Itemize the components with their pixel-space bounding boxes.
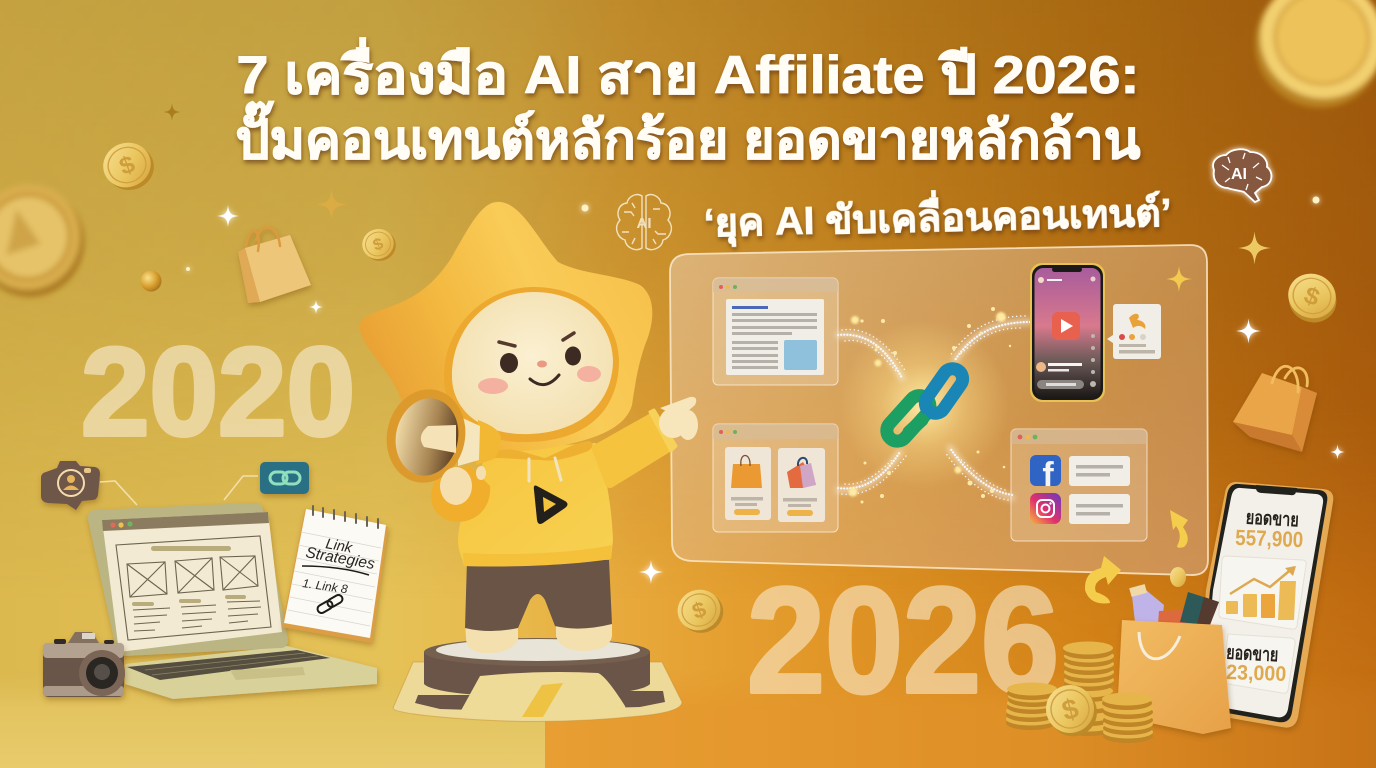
nose [537,360,547,368]
megaphone bell ring [378,382,474,490]
icon: chain link [883,365,967,445]
floor: left yellow [0,694,545,768]
notebook: link strategies: Link [324,536,354,557]
sparkle in panel [1166,266,1192,292]
window: shop [713,424,838,532]
small gold bead [140,270,162,292]
sparkle streams [838,316,1030,500]
bag items [1129,584,1219,625]
connector line camera [100,481,137,505]
coin lower centre: $ [689,597,710,624]
hoodie hem [463,545,612,567]
icon: shopping bag right [1233,366,1317,452]
year 2026: 2026 [747,556,1059,724]
sparkle: white right [1236,318,1261,344]
sales label lower: ยอดขาย [1226,643,1279,666]
megaphone plunger [421,425,456,453]
pedestal dark cylinder [424,652,650,698]
hoodie play icon [534,486,568,524]
megaphone band [458,416,480,466]
coin top left: $ [116,150,139,181]
icon: instagram [1030,493,1061,524]
front coin [1041,679,1102,742]
pedestal base [393,662,682,722]
window: article [713,278,838,385]
pedestal white top [436,639,640,661]
pedestal ring top [424,638,650,666]
browser bar [102,512,269,531]
right arm sleeve [597,418,670,483]
coin near bag left [358,224,400,266]
link badge icon [260,462,309,494]
holding hand [440,466,486,505]
floor: right orange [545,700,1229,768]
sparkle: white lower centre [639,560,663,584]
laptop [88,503,377,699]
decorative coin: large blurred top right [1234,0,1376,128]
coin stack back [1063,642,1114,736]
sparkle: white far right [1330,444,1345,460]
year 2020: 2020 [81,323,355,462]
gold arrow large [1085,556,1121,603]
shorts [465,560,612,631]
laptop screen [102,512,282,652]
wireframe page [116,536,271,640]
holding sleeve [431,466,490,522]
hoodie body [458,443,613,566]
sparkle: gold top left [163,103,181,121]
notebook: link strategies: Strategies [304,544,376,573]
pedestal front plate [458,672,628,720]
coin stacks [1006,642,1153,743]
laptop base [125,646,377,699]
icon: AI brain centre: AI [636,215,652,232]
coin right edge [1281,267,1344,329]
title [236,37,1140,170]
shopping bag large [1117,620,1231,734]
small coin [1170,567,1186,587]
coin stack left [1006,682,1058,730]
sales figure top: 557,900 [1235,525,1304,552]
camera [43,632,125,697]
notebook: link strategies [282,506,388,643]
phone: video [1030,263,1105,402]
right cuff [650,410,676,451]
sparkle: gold left [316,189,347,220]
chart card [1219,556,1306,629]
coin top left [97,135,160,197]
sparkle: white left [217,205,239,227]
background top shading [0,0,1376,516]
centre glow [839,320,1009,490]
sales label top: ยอดขาย [1245,508,1299,531]
coin near bag left: $ [370,234,386,255]
sparkle: gold right [1238,232,1271,264]
icon: AI brain centre [617,195,671,250]
chat card [1107,304,1161,359]
laptop lid [88,503,288,656]
coin lower centre [672,583,729,639]
camera chat bubble icon [41,461,100,510]
floor [0,694,1229,768]
legs [465,620,612,653]
pedestal gold slash [522,683,563,717]
subtitle: ‘ยุค AI ขับเคลื่อนคอนเทนต์’ [703,185,1172,247]
background right edge shading [1014,0,1376,624]
sales figure lower: 23,000 [1226,661,1287,686]
megaphone tube [476,420,501,465]
icon: facebook: f [1042,456,1054,494]
front coin: $ [1059,692,1082,726]
notebook: link strategies: 1. Link 8 [302,576,349,596]
decorative coin: large blurred left [0,169,101,312]
glow dots [186,196,1320,271]
pointing hand [659,397,698,440]
face [452,292,613,434]
coin right edge: $ [1300,282,1323,312]
window: social [1011,429,1147,541]
icon: shopping bag left [238,227,311,303]
gold arrow small [1170,510,1188,548]
glass panel [670,245,1208,575]
pedestal tabs [415,691,665,710]
character [360,202,698,722]
hood inner ring [444,287,619,442]
mouth [530,375,559,385]
sales phone [1196,482,1333,728]
sparkle: white small [309,300,323,314]
cheeks [478,366,601,394]
eyes and brows [500,346,581,373]
connector line link [224,476,258,500]
title line 1: 7 เครื่องมือ AI สาย Affiliate ปี 2026: [236,37,1140,105]
megaphone bell inside [389,392,465,482]
hood star [360,202,652,452]
hoodie collar and strings [495,441,593,481]
icon: AI brain right [1213,149,1271,202]
megaphone [378,382,501,490]
icon: AI brain right: AI [1231,166,1247,183]
laptop keyboard [127,650,330,680]
coin stack right [1102,692,1153,743]
sales card lower [1222,634,1295,693]
title line 2: ปั๊มคอนเทนต์หลักร้อย ยอดขายหลักล้าน [236,101,1140,170]
